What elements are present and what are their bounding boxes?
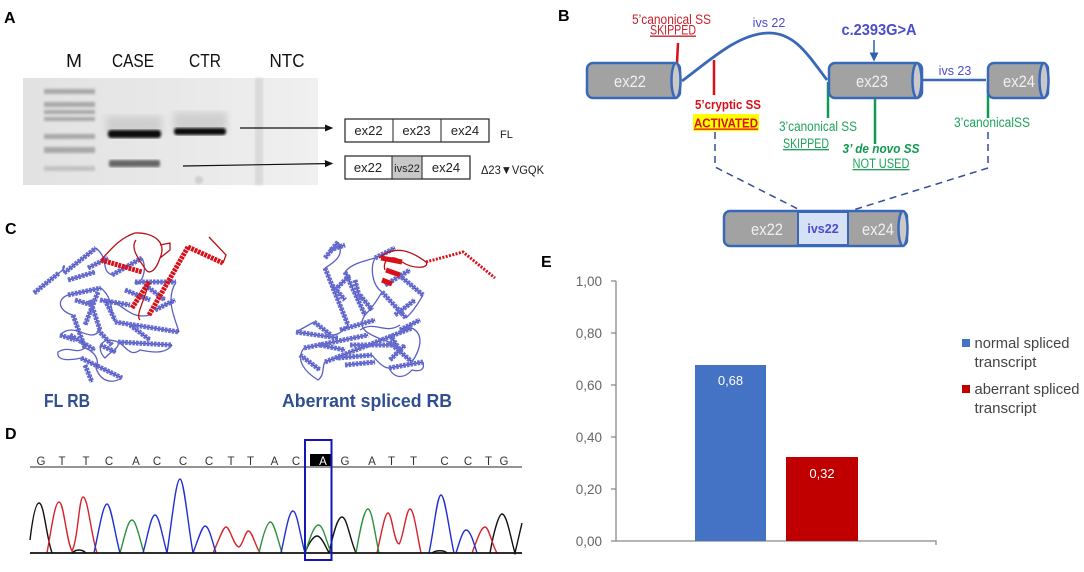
sequence letters: C	[464, 456, 472, 468]
transcript: FL exon boxes: ex22	[354, 123, 383, 138]
sequence letters: A	[132, 456, 140, 468]
aberrant RB red coil	[379, 250, 427, 270]
panel: B splicing diagram	[558, 8, 1048, 246]
label: 3' canonical SS skipped: 3’canonical SS	[779, 119, 857, 134]
bar: aberrant spliced 0,32	[786, 457, 858, 541]
gel image	[23, 78, 318, 185]
sequence letters: C	[440, 456, 449, 468]
sequence letters: A	[368, 456, 376, 468]
bar: normal spliced 0,68: 0,68	[718, 373, 743, 388]
legend: transcript	[974, 400, 1037, 417]
heading: panel B letter: B	[558, 8, 570, 25]
sequence letters: T	[388, 456, 395, 468]
aberrant RB red tail	[426, 252, 495, 278]
label: 3' de novo SS not used: NOT USED	[852, 156, 910, 171]
sequence letters: G	[500, 456, 509, 468]
splice site markers	[677, 43, 988, 144]
legend	[962, 335, 1080, 417]
transcript: FL exon boxes: ex24	[451, 123, 479, 138]
dashed connector left	[715, 132, 800, 210]
aberrant RB red blob	[381, 258, 402, 284]
label: 5' canonical SS skipped: SKIPPED	[650, 22, 696, 38]
y axis tick labels: 0,00	[576, 534, 602, 549]
label: 5' cryptic SS activated: ACTIVATED	[694, 116, 758, 130]
structure: aberrant spliced RB	[296, 242, 495, 380]
arrow: full-length band to FL transcript	[240, 127, 332, 129]
sequence letters: G	[341, 456, 350, 468]
intron 22 curve	[682, 33, 827, 81]
exon 23 cylinder: ex23	[856, 72, 888, 91]
transcript: aberrant exon boxes: ivs22	[394, 163, 420, 175]
transcript: aberrant exon boxes	[345, 156, 470, 179]
highlight box on variant base	[305, 440, 332, 560]
panel: C protein structures	[5, 221, 495, 411]
transcript: aberrant exon boxes: ex22	[354, 160, 382, 175]
sequence letters: T	[410, 456, 417, 468]
exon 22 cylinder: ex22	[614, 72, 646, 91]
sequence letters: T	[485, 456, 492, 468]
label: 5' canonical SS skipped	[632, 12, 711, 38]
label: ivs 23: ivs 23	[939, 64, 971, 78]
label: FL RB: FL RB	[44, 391, 90, 411]
aberrant RB blue helices	[296, 242, 423, 370]
label: mutation c.2393G>A: c.2393G>A	[842, 22, 917, 39]
label: 5' cryptic SS activated	[693, 97, 761, 131]
label: 3' de novo SS not used: 3’ de novo SS	[842, 141, 920, 156]
sequence letters: T	[227, 456, 235, 468]
label: delta 23 VGQK: Δ23▼VGQK	[481, 163, 544, 177]
highlighted base background	[310, 454, 331, 466]
FL RB helix backbone	[34, 248, 179, 382]
label: FL: FL	[500, 129, 513, 141]
spliced product cylinder: ivs22	[807, 222, 839, 236]
transcript: FL exon boxes: ex23	[402, 123, 431, 138]
label: 5' cryptic SS activated: 5’cryptic SS	[695, 97, 761, 112]
sequence letters: C	[179, 456, 187, 468]
label: Aberrant spliced RB: Aberrant spliced RB	[282, 391, 452, 411]
panel: D sequencing chromatogram	[5, 426, 522, 560]
axes	[611, 281, 936, 545]
gel lane labels: CASE	[112, 51, 154, 71]
y axis tick labels: 0,20	[576, 482, 602, 497]
bar: normal spliced 0,68	[695, 365, 766, 541]
y axis tick labels	[576, 274, 602, 549]
FL RB red helices	[101, 247, 223, 315]
label: 3' canonical SS skipped	[779, 119, 857, 151]
FL RB loops	[58, 248, 179, 381]
gel lane labels: CTR	[189, 51, 221, 71]
exon 24 cylinder	[988, 63, 1048, 98]
bar: aberrant spliced 0,32: 0,32	[809, 466, 835, 481]
y axis tick labels: 1,00	[576, 274, 602, 289]
label: 3' canonical SS skipped: SKIPPED	[783, 136, 829, 151]
aberrant RB loops	[296, 242, 423, 380]
sequence rule	[30, 466, 522, 468]
sequence letters: C	[292, 456, 300, 468]
spliced product cylinder: ex22	[751, 220, 783, 239]
label: 5' canonical SS skipped: 5’canonical SS	[632, 12, 711, 27]
sequence letters: T	[247, 456, 254, 468]
transcript: aberrant exon boxes: ex24	[432, 160, 460, 175]
panel: E bar chart	[541, 254, 1080, 549]
sequence letters: C	[153, 456, 161, 468]
y axis tick labels: 0,80	[576, 326, 602, 341]
arrow: aberrant band to shorter transcript	[183, 164, 332, 166]
legend: aberrant spliced	[974, 381, 1080, 398]
gel lane labels	[66, 51, 304, 71]
panel: A gel electrophoresis	[4, 10, 544, 185]
spliced product cylinder: ex24	[862, 220, 894, 239]
arrow: mutation position	[873, 40, 875, 60]
gel lane labels: M	[66, 51, 82, 71]
sequence letters: T	[82, 456, 90, 468]
dashed connector right	[850, 132, 988, 211]
heading: panel A letter: A	[4, 10, 16, 27]
exon 22 cylinder	[587, 63, 680, 98]
sequence letters: A	[271, 456, 279, 468]
structure: FL RB	[34, 233, 226, 382]
gel lane labels: NTC	[270, 51, 304, 71]
label: 3' canonical SS: 3’canonicalSS	[954, 115, 1030, 130]
FL RB red loops	[101, 233, 226, 320]
sequence letters: T	[58, 456, 66, 468]
aberrant RB helix backbone	[296, 242, 423, 370]
sequence letters	[37, 456, 509, 468]
sequence letters: C	[205, 456, 213, 468]
legend: transcript	[974, 354, 1037, 371]
FL RB blue helices	[34, 248, 179, 382]
intron 23 line	[922, 79, 986, 81]
sequence letters: C	[105, 456, 113, 468]
transcript: FL exon boxes	[345, 119, 489, 142]
label: 3' de novo SS not used	[842, 141, 920, 171]
label: ivs 22: ivs 22	[753, 16, 785, 30]
exon 23 cylinder	[829, 63, 922, 98]
sequence letters: A	[319, 456, 327, 468]
chromatogram traces	[30, 479, 522, 553]
exon 24 cylinder: ex24	[1003, 72, 1035, 91]
heading: panel E letter: E	[541, 254, 552, 271]
y axis tick labels: 0,40	[576, 430, 602, 445]
spliced product cylinder	[724, 211, 908, 246]
legend: normal spliced	[974, 335, 1070, 352]
heading: panel C letter: C	[5, 221, 17, 238]
sequence letters: G	[37, 456, 46, 468]
y axis tick labels: 0,60	[576, 378, 602, 393]
heading: panel D letter: D	[5, 426, 17, 443]
